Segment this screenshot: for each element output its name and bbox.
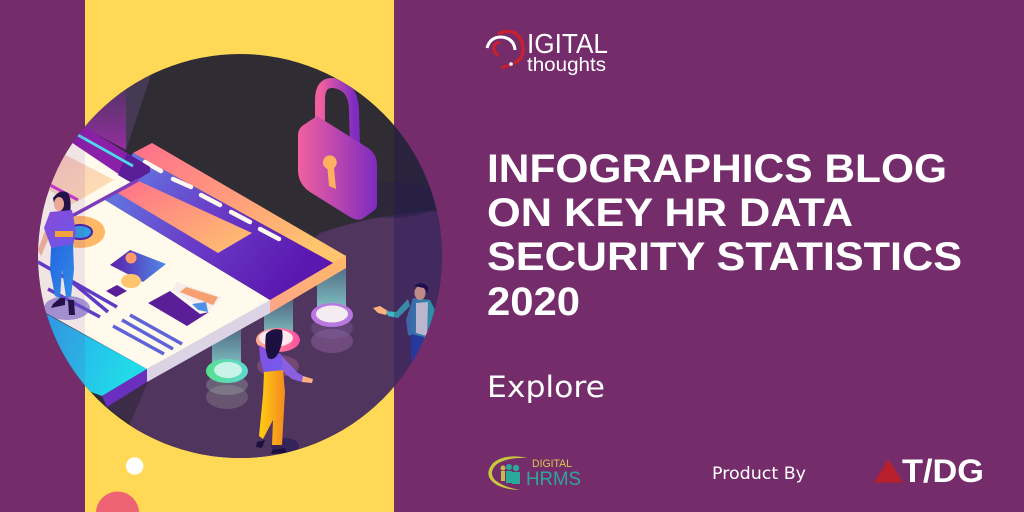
hair — [265, 329, 283, 359]
hologram disc purple — [311, 303, 353, 353]
lock shackle — [320, 83, 355, 147]
faint light wedge — [126, 74, 151, 150]
TDG logo — [874, 453, 984, 489]
shadow — [44, 296, 90, 320]
pink banner block — [116, 178, 252, 253]
hair — [53, 191, 71, 214]
floor — [130, 211, 445, 462]
logo red arc — [498, 31, 523, 63]
logo white arc — [487, 37, 515, 50]
shoes — [51, 298, 75, 315]
envelope — [148, 291, 209, 326]
Digital HRMS logo — [488, 456, 581, 490]
banner dashes — [145, 162, 279, 239]
main title: ON KEY HR DATA — [487, 191, 853, 235]
platform lilac front wall — [147, 299, 270, 382]
hair — [414, 283, 428, 293]
head — [414, 286, 426, 300]
hologram disc green — [206, 359, 248, 409]
floor shadow wedge — [107, 382, 148, 423]
wordmark: T/DG — [902, 453, 984, 489]
arm — [276, 354, 305, 382]
face — [54, 197, 64, 211]
keyhole — [323, 155, 337, 189]
top — [259, 345, 283, 376]
logo small red arc — [494, 42, 500, 55]
platform pink rim — [133, 143, 346, 263]
light beam 2 — [264, 298, 293, 332]
padlock — [298, 83, 377, 220]
small purple diamond — [106, 285, 127, 297]
woman in the centre — [256, 329, 313, 454]
explore label: Explore — [487, 370, 605, 404]
brand logo: Digital Thoughts — [487, 28, 608, 76]
red triangle — [874, 459, 903, 482]
window corner block — [118, 153, 150, 183]
pants — [259, 370, 285, 445]
window pane — [42, 142, 130, 214]
light beam 3 — [317, 262, 346, 306]
tablet circle — [126, 252, 136, 264]
window image — [49, 155, 114, 204]
wordmark HRMS: HRMS — [526, 469, 581, 490]
platform orange front wall — [270, 255, 346, 313]
product by label: Product By — [712, 464, 806, 484]
main title: SECURITY STATISTICS — [487, 235, 962, 279]
lock body — [298, 116, 377, 220]
main title: INFOGRAPHICS BLOG — [487, 147, 947, 191]
tablet icon — [110, 250, 166, 282]
soft shadow behind lock — [380, 191, 436, 218]
logo dots — [509, 62, 513, 66]
arm with cup — [55, 231, 73, 237]
ghost discs — [257, 355, 299, 377]
pants — [411, 334, 424, 362]
pointing hand — [121, 274, 141, 288]
paper blue strip — [192, 302, 208, 312]
left tint over purple — [30, 50, 85, 462]
platform purple underside — [102, 369, 147, 407]
orange chart circle — [73, 216, 105, 248]
yellow vertical band — [85, 0, 394, 512]
browser window — [42, 127, 150, 217]
ghost discs — [206, 385, 248, 409]
disc — [206, 359, 248, 383]
hologram disc pink — [256, 328, 300, 377]
blue and purple banner — [105, 153, 333, 300]
logo wordmark IGITAL: IGITAL — [527, 28, 608, 59]
shoes — [256, 440, 287, 454]
text lines lower — [113, 315, 182, 354]
woman on the left — [38, 191, 90, 320]
man on the right — [373, 283, 436, 362]
logo lower dashed arc — [501, 64, 513, 68]
disc — [256, 328, 300, 352]
platform cyan side — [46, 314, 147, 396]
window title bar — [72, 127, 150, 182]
hand — [302, 376, 313, 383]
swoosh — [488, 456, 528, 490]
ghost discs — [311, 329, 353, 353]
paper orange strip — [180, 287, 218, 305]
window purple edge — [72, 180, 138, 216]
circular illustration — [28, 50, 450, 462]
main title: 2020 — [487, 280, 580, 324]
window pink stripe — [50, 185, 78, 200]
window cyan line — [78, 135, 133, 166]
disc — [311, 303, 353, 327]
hand — [373, 306, 388, 315]
shadow — [271, 438, 299, 454]
top — [44, 210, 76, 250]
people icons — [500, 464, 520, 484]
jacket — [406, 298, 436, 340]
main title — [487, 147, 962, 324]
arm — [386, 299, 410, 318]
dark backdrop — [30, 50, 450, 462]
pants — [50, 244, 74, 298]
newsletter paper — [172, 282, 222, 312]
blue chart ring — [68, 225, 92, 239]
platform — [28, 120, 346, 407]
right tint over purple — [394, 50, 446, 462]
decorative white dot — [126, 457, 143, 475]
white top surface — [30, 140, 270, 369]
translucent purple light beam — [85, 89, 126, 150]
wordmark DIGITAL: DIGITAL — [532, 458, 572, 470]
text lines near woman — [38, 262, 117, 317]
logo wordmark thoughts: thoughts — [527, 55, 606, 76]
decorative coral circle — [96, 492, 139, 512]
light beam 1 — [212, 329, 241, 362]
arm — [38, 225, 50, 256]
shirt — [416, 302, 428, 336]
